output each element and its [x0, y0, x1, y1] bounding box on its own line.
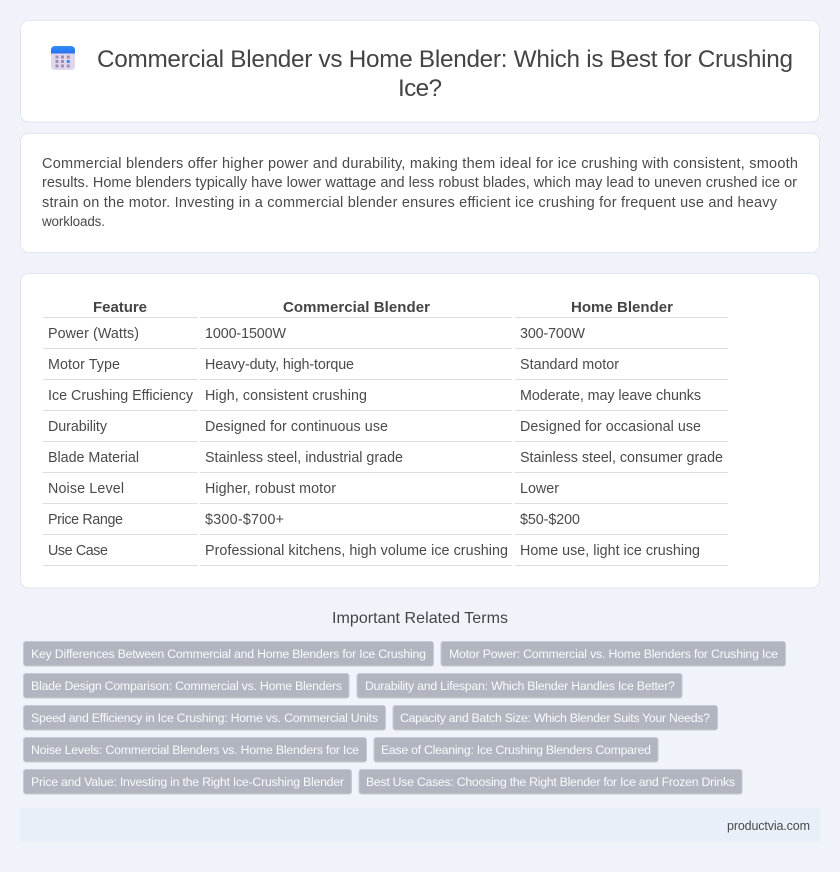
footer: productvia.com — [727, 819, 810, 833]
tag: Best Use Cases: Choosing the Right Blender for Ice and Frozen Drinks — [366, 775, 735, 789]
row: motor type: Motor Type — [48, 357, 120, 373]
tag: Noise Levels: Commercial Blenders vs. Home Blenders for Ice — [31, 743, 359, 757]
row: price range: $50-$200 — [520, 512, 580, 528]
table header: Home Blender — [571, 299, 673, 316]
row: price range — [48, 512, 580, 528]
tag — [24, 738, 366, 762]
row: ice crushing efficiency: Ice Crushing Efficiency — [48, 388, 194, 404]
intro paragraph: workloads. — [41, 214, 105, 229]
tag: Blade Design Comparison: Commercial vs. Home Blenders — [31, 679, 342, 693]
tag: Capacity and Batch Size: Which Blender Suits Your Needs? — [400, 711, 710, 725]
row: motor type — [48, 357, 619, 373]
row: noise level: Noise Level — [48, 481, 124, 497]
tag: Ease of Cleaning: Ice Crushing Blenders Compared — [381, 743, 651, 757]
row: power: 300-700W — [520, 326, 586, 342]
tag — [24, 706, 386, 730]
intro paragraph: strain on the motor. Investing in a commercial blender ensures efficient ice crushing for frequent use and heavy — [42, 195, 778, 211]
tag: Durability and Lifespan: Which Blender Handles Ice Better? — [365, 679, 675, 693]
tag — [24, 674, 349, 698]
row: use case — [48, 543, 700, 559]
title: Ice? — [398, 75, 442, 102]
row: ice crushing efficiency — [48, 388, 701, 404]
tag — [24, 642, 434, 666]
intro paragraph: Commercial blenders offer higher power and durability, making them ideal for ice crushing with consistent, smooth — [42, 156, 798, 172]
row: blade material: Stainless steel, industrial grade — [205, 450, 403, 466]
title: Commercial Blender vs Home Blender: Which is Best for Crushing — [97, 46, 793, 73]
row: blade material: Blade Material — [48, 450, 139, 466]
icon: calendar grid — [51, 46, 75, 70]
tag — [374, 738, 658, 762]
row: power: 1000-1500W — [205, 326, 286, 342]
heading: related terms: Important Related Terms — [332, 610, 508, 627]
tag — [24, 770, 352, 794]
row: use case: Professional kitchens, high volume ice crushing — [205, 543, 508, 559]
row: use case: Home use, light ice crushing — [520, 543, 700, 559]
table header — [93, 299, 673, 316]
tag: Motor Power: Commercial vs. Home Blenders for Crushing Ice — [449, 647, 778, 661]
row: power: Power (Watts) — [48, 326, 139, 342]
panel: comparison table — [20, 274, 820, 588]
intro paragraph: results. Home blenders typically have lower wattage and less robust blades, which may lead to uneven crushed ice or — [42, 175, 797, 191]
row: price range: $300-$700+ — [205, 512, 284, 528]
table header: Commercial Blender — [283, 299, 430, 316]
row: noise level: Higher, robust motor — [205, 481, 336, 497]
row: motor type: Standard motor — [520, 357, 619, 373]
intro paragraph — [41, 156, 798, 229]
row: durability: Durability — [48, 419, 108, 435]
row: motor type: Heavy-duty, high-torque — [205, 357, 354, 373]
row: durability: Designed for occasional use — [520, 419, 701, 435]
row: noise level: Lower — [520, 481, 559, 497]
panel: intro text — [20, 134, 820, 252]
row: durability: Designed for continuous use — [205, 419, 388, 435]
row: power — [48, 326, 586, 342]
footer — [20, 808, 820, 842]
tag — [393, 706, 718, 730]
row: blade material: Stainless steel, consumer grade — [520, 450, 723, 466]
row: durability — [48, 419, 701, 435]
row: use case: Use Case — [48, 543, 108, 559]
row: price range: Price Range — [48, 512, 123, 528]
related term tags — [24, 642, 786, 794]
row: ice crushing efficiency: High, consistent crushing — [205, 388, 367, 404]
panel: title card — [20, 20, 820, 122]
row: noise level — [48, 481, 559, 497]
tag — [441, 642, 786, 666]
tag — [359, 770, 742, 794]
tag: Key Differences Between Commercial and Home Blenders for Ice Crushing — [31, 647, 426, 661]
row: ice crushing efficiency: Moderate, may leave chunks — [520, 388, 701, 404]
tag — [357, 674, 682, 698]
title — [97, 46, 793, 102]
tag: Speed and Efficiency in Ice Crushing: Home vs. Commercial Units — [31, 711, 378, 725]
row: blade material — [48, 450, 723, 466]
table header: Feature — [93, 299, 147, 316]
tag: Price and Value: Investing in the Right Ice-Crushing Blender — [31, 775, 344, 789]
